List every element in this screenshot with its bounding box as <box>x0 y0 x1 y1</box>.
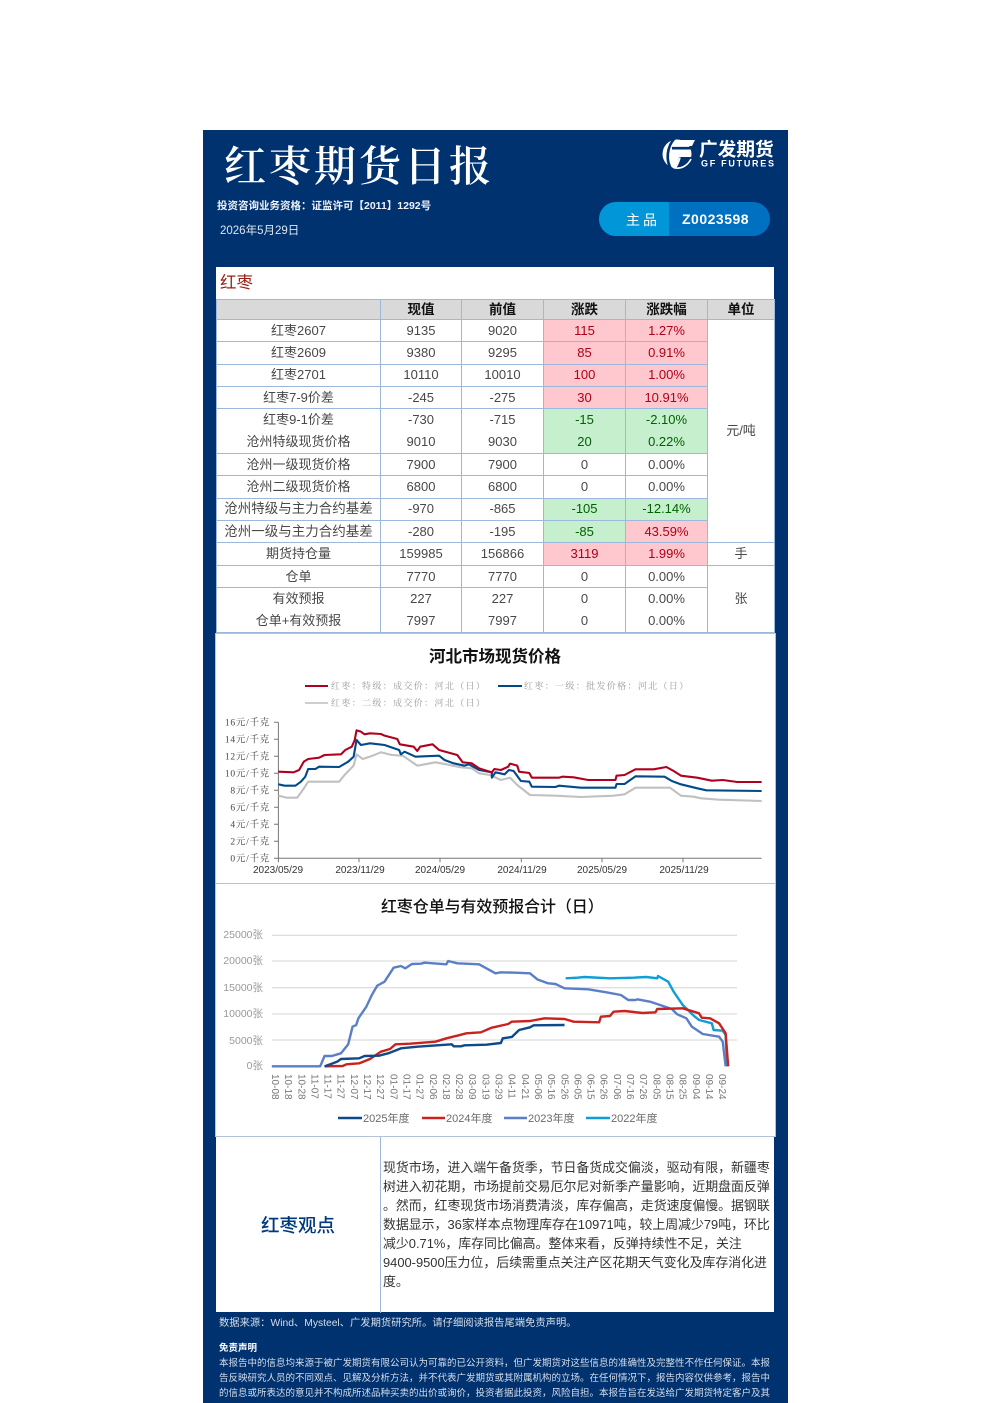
x axis labels: 04-21 <box>519 1074 530 1100</box>
outlook heading <box>216 1137 381 1313</box>
x axis labels: 12-17 <box>361 1074 372 1100</box>
panel: warehouse receipts chart <box>215 883 776 1137</box>
data table: 仓单 <box>285 568 312 584</box>
data table: 0.00% <box>648 479 685 494</box>
x axis labels: 01-27 <box>414 1074 425 1100</box>
disclaimer heading: 免责声明 <box>219 1343 257 1354</box>
data lines <box>272 961 728 1066</box>
icon: GF Futures logo <box>662 139 774 169</box>
x axis labels: 08-05 <box>650 1074 661 1100</box>
data table: 红枣9-1价差 <box>263 412 334 427</box>
legend <box>338 1111 657 1125</box>
y axis and grid: 15000张 <box>223 982 263 994</box>
data table: 期货持仓量 <box>266 546 331 561</box>
outlook text: 。然而，红枣现货市场消费清淡，库存偏高，走货速度偏慢。据钢联 <box>383 1198 770 1213</box>
chart title: Hebei spot price: 河北市场现货价格 <box>429 648 561 666</box>
data table: 9380 <box>407 345 435 360</box>
table heading <box>216 267 774 299</box>
x axis labels: 12-27 <box>374 1074 385 1100</box>
data table: 1.99% <box>648 546 685 561</box>
data table: 沧州特级与主力合约基差 <box>224 501 373 516</box>
x axis labels: 02-28 <box>453 1074 464 1100</box>
outlook text: 现货市场，进入端午备货季，节日备货成交偏淡，驱动有限，新疆枣 <box>383 1160 770 1175</box>
line chart: Hebei spot price <box>225 679 762 876</box>
y axis and grid: 25000张 <box>223 929 263 941</box>
data table: 9295 <box>488 345 517 360</box>
data table: 0 <box>581 456 588 472</box>
panel: Hebei spot price chart <box>215 633 776 884</box>
legend: 红枣：一级：批发价格：河北（日） <box>524 679 690 692</box>
data table: -280 <box>408 524 434 538</box>
data table: 有效预报 <box>272 591 324 606</box>
x axis labels: 08-25 <box>677 1074 688 1100</box>
x axis labels: 2024/05/29 <box>415 865 465 876</box>
x axis labels: 09-04 <box>690 1074 701 1100</box>
data table: 0 <box>581 591 588 606</box>
data table: 7997 <box>407 613 435 628</box>
x axis labels: 03-09 <box>466 1074 477 1100</box>
x axis labels: 2024/11/29 <box>497 865 547 876</box>
data table: 现值 <box>408 302 434 316</box>
data table: -2.10% <box>646 412 687 427</box>
data table: 20 <box>577 434 592 449</box>
icon: GF Futures logo: GF FUTURES <box>701 158 774 168</box>
data table: 涨跌幅 <box>646 302 687 316</box>
data table: 涨跌 <box>571 302 598 316</box>
icon: GF Futures logo: 广发期货 <box>699 139 774 160</box>
data table: 0.00% <box>648 456 685 472</box>
x axis labels <box>253 865 709 876</box>
x axis labels: 07-16 <box>624 1074 635 1100</box>
x axis labels: 07-06 <box>611 1074 622 1100</box>
y axis and grid: 0张 <box>247 1060 263 1072</box>
data table: 1.27% <box>648 322 685 338</box>
data table: 100 <box>574 367 595 382</box>
x axis labels: 01-07 <box>387 1074 398 1100</box>
x axis labels: 11-07 <box>308 1074 319 1099</box>
x axis labels: 03-29 <box>492 1074 504 1100</box>
x axis labels: 01-17 <box>400 1074 412 1100</box>
y axis and grid: 5000张 <box>229 1035 263 1047</box>
data lines <box>278 730 762 801</box>
data table: 7900 <box>488 456 517 472</box>
data table: 159985 <box>399 546 443 561</box>
x axis labels: 2023/11/29 <box>335 865 385 876</box>
y axis: 10元/千克 <box>225 768 270 780</box>
data table: 227 <box>492 591 513 606</box>
data table: -970 <box>408 501 434 516</box>
x axis labels: 08-15 <box>664 1074 674 1100</box>
data table: 10010 <box>484 367 521 382</box>
outlook text: 度。 <box>383 1274 409 1289</box>
y axis: 16元/千克 <box>225 716 270 728</box>
x axis labels: 2025/11/29 <box>659 865 709 876</box>
chart title: warehouse receipts: 红枣仓单与有效预报合计（日） <box>381 899 604 916</box>
y axis and grid: 10000张 <box>223 1008 263 1020</box>
qualification text: 投资咨询业务资格：证监许可【2011】1292号 <box>217 200 431 212</box>
data table: 85 <box>577 345 592 360</box>
y axis <box>225 716 762 864</box>
data table: 单位 <box>728 302 754 316</box>
y axis: 6元/千克 <box>230 802 270 814</box>
x axis labels: 2023/05/29 <box>253 865 303 876</box>
data table: 9020 <box>488 322 517 338</box>
x axis labels: 04-11 <box>506 1074 517 1099</box>
data table: 156866 <box>481 546 524 561</box>
data table: -865 <box>489 501 516 516</box>
data table: -715 <box>489 412 516 427</box>
x axis labels: 05-26 <box>558 1074 569 1100</box>
legend: 红枣：特级：成交价：河北（日） <box>331 679 486 692</box>
data table: 红枣2609 <box>271 345 326 360</box>
legend: 2025年度 <box>363 1111 409 1125</box>
legend <box>305 679 690 709</box>
data table: 0 <box>581 479 588 494</box>
data table: 红枣2701 <box>271 367 326 382</box>
data table: -245 <box>408 390 434 404</box>
y axis and grid <box>223 929 737 1072</box>
panel: jujube outlook <box>216 1136 774 1312</box>
y axis: 4元/千克 <box>230 818 270 830</box>
x axis labels: 12-07 <box>348 1074 359 1100</box>
legend: 2024年度 <box>446 1111 492 1125</box>
data table: 沧州特级现货价格 <box>246 434 350 449</box>
title: 红枣期货日报 <box>224 145 494 191</box>
badge label <box>599 202 669 236</box>
x axis labels: 02-06 <box>427 1074 438 1100</box>
data table: 115 <box>574 322 595 338</box>
x axis labels: 05-16 <box>545 1074 556 1100</box>
data table: 0 <box>581 568 588 584</box>
data table: 元/吨 <box>726 423 756 438</box>
x axis labels: 10-18 <box>282 1074 293 1100</box>
data table: 6800 <box>488 479 517 494</box>
data table: 7997 <box>488 613 517 628</box>
header and report background panel <box>203 130 788 1403</box>
x axis labels: 02-18 <box>440 1074 451 1100</box>
legend: 2022年度 <box>611 1111 657 1125</box>
y axis and grid: 20000张 <box>223 955 263 967</box>
data table: 7770 <box>407 568 435 584</box>
data table: -275 <box>489 390 516 404</box>
disclaimer text: 本报告中的信息均来源于被广发期货有限公司认为可靠的已公开资料，但广发期货对这些信息的准确性及完整性不作任何保证。本报 <box>219 1358 770 1369</box>
data table: 0.00% <box>648 568 685 584</box>
data source note: 数据来源：Wind、Mysteel、广发期货研究所。请仔细阅读报告尾端免责声明。 <box>219 1318 577 1329</box>
data table <box>216 299 775 633</box>
x axis labels: 06-26 <box>598 1074 609 1100</box>
disclaimer text: 的信息或所表达的意见并不构成所述品种买卖的出价或询价，投资者据此投资，风险自担。本报告旨在发送给广发期货特定客户及其 <box>219 1388 770 1399</box>
x axis labels: 10-08 <box>269 1074 280 1100</box>
data table: 30 <box>577 390 592 404</box>
data table: 沧州一级现货价格 <box>246 456 350 472</box>
data table: 3119 <box>571 546 598 561</box>
data table: 6800 <box>407 479 435 494</box>
table heading: 红枣 <box>220 274 253 292</box>
data table: 1.00% <box>648 367 685 382</box>
data table: 红枣7-9价差 <box>263 390 334 404</box>
x axis labels: 09-14 <box>703 1074 714 1100</box>
data table: 张 <box>734 591 748 606</box>
data table: 9135 <box>407 322 435 338</box>
y axis: 12元/千克 <box>225 750 270 762</box>
data table: 9030 <box>488 434 517 449</box>
data table: -15 <box>575 412 594 427</box>
outlook text: 减少0.71%，库存同比偏高。整体来看，反弹持续性不足，关注 <box>383 1236 742 1251</box>
x axis labels: 05-06 <box>532 1074 543 1100</box>
data table: -12.14% <box>642 501 691 516</box>
x axis labels: 07-26 <box>637 1074 648 1100</box>
data table: 0.91% <box>648 345 685 360</box>
outlook text: 9400-9500压力位，后续需重点关注产区花期天气变化及库存消化进 <box>383 1255 767 1270</box>
data table: 沧州二级现货价格 <box>246 479 350 494</box>
y axis: 14元/千克 <box>225 734 270 746</box>
x axis labels: 2025/05/29 <box>577 865 627 876</box>
data table: 0 <box>581 613 588 628</box>
y axis: 2元/千克 <box>230 836 270 848</box>
data table: 227 <box>410 591 432 606</box>
data table: 前值 <box>489 302 516 316</box>
data table: 7770 <box>488 568 517 584</box>
badge label: 主品 <box>626 212 660 228</box>
report date: 2026年5月29日 <box>220 225 299 237</box>
x axis labels: 11-17 <box>322 1074 333 1099</box>
disclaimer text: 告反映研究人员的不同观点、见解及分析方法，并不代表广发期货或其附属机构的立场。在任何情况下，报告内容仅供参考，报告中 <box>219 1373 770 1384</box>
legend: 2023年度 <box>528 1111 574 1125</box>
data table: 43.59% <box>644 524 689 538</box>
x axis labels <box>269 1074 727 1100</box>
data table: -730 <box>408 412 434 427</box>
data table: -195 <box>489 524 516 538</box>
data table: 10.91% <box>644 390 689 404</box>
data table: 手 <box>734 546 748 561</box>
legend: 红枣：二级：成交价：河北（日） <box>331 696 486 709</box>
data table: 红枣2607 <box>271 322 326 338</box>
data table: 0.22% <box>648 434 685 449</box>
x axis labels: 03-19 <box>479 1074 490 1100</box>
x axis labels: 10-28 <box>295 1074 306 1100</box>
data table: 0.00% <box>648 613 685 628</box>
data table: 沧州一级与主力合约基差 <box>224 524 373 538</box>
x axis labels: 09-24 <box>716 1074 727 1100</box>
outlook heading: 红枣观点 <box>261 1215 335 1236</box>
outlook text: 树进入初花期，市场提前交易厄尔尼对新季产量影响，近期盘面反弹 <box>383 1179 770 1194</box>
data table: -105 <box>571 501 598 516</box>
data table: 9010 <box>407 434 435 449</box>
y axis: 8元/千克 <box>230 784 270 796</box>
line chart: warehouse receipts <box>223 929 737 1125</box>
data table: 仓单+有效预报 <box>256 613 341 628</box>
data table: 0.00% <box>648 591 685 606</box>
x axis labels: 06-15 <box>585 1074 596 1100</box>
disclaimer text <box>219 1358 770 1399</box>
x axis labels: 06-05 <box>571 1074 582 1100</box>
data table: 10110 <box>403 367 439 382</box>
data table: 7900 <box>407 456 435 472</box>
outlook text: 数据显示，36家样本点物理库存在10971吨，较上周减少79吨，环比 <box>383 1217 770 1232</box>
outlook text <box>383 1160 770 1289</box>
badge code: Z0023598 <box>682 211 749 227</box>
x axis labels: 11-27 <box>335 1074 346 1099</box>
y axis: 0元/千克 <box>230 852 270 864</box>
data table: -85 <box>575 524 594 538</box>
analyst badge <box>599 202 770 236</box>
